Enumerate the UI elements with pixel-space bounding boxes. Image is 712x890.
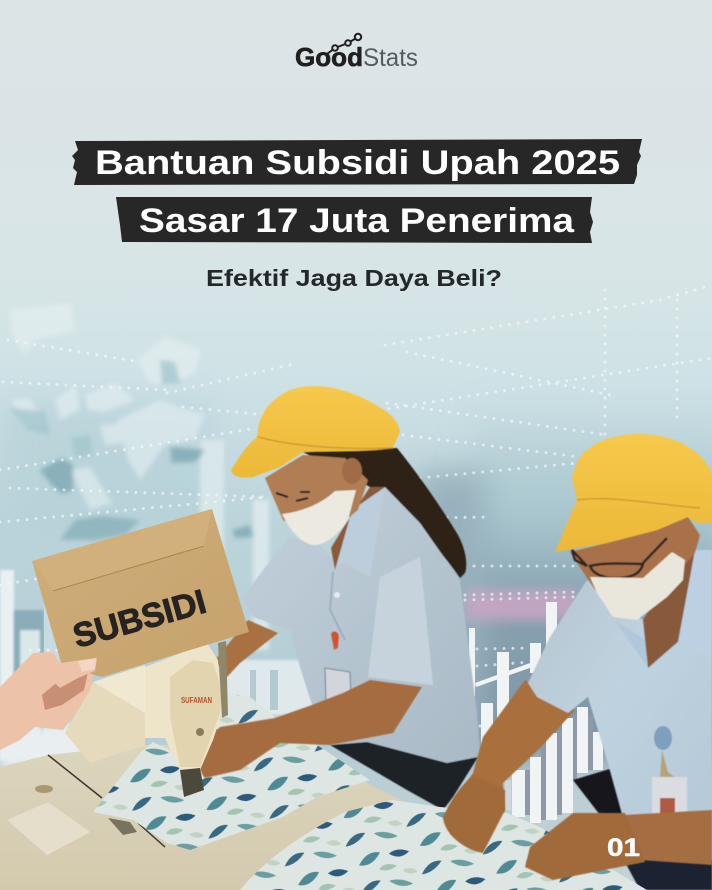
id lanyard <box>660 750 676 778</box>
shirt inner collar <box>615 620 648 668</box>
title banner line 1: Bantuan Subsidi Upah 2025 <box>95 144 620 182</box>
thumb on envelope <box>50 658 97 688</box>
sewing table <box>0 745 407 890</box>
title banner line 1 <box>72 139 642 185</box>
shirt body <box>242 487 480 763</box>
worker one <box>215 386 480 810</box>
pants <box>330 742 478 810</box>
fabric in front <box>240 800 647 890</box>
background: dotted trend lines <box>0 285 712 735</box>
shirt placket <box>330 572 345 640</box>
title banner line 2 <box>116 197 593 243</box>
worker two hands <box>443 775 712 880</box>
id badge <box>652 777 687 817</box>
id badge <box>325 668 351 702</box>
pocket button <box>654 726 672 750</box>
far arm <box>215 620 278 677</box>
pants lower <box>597 810 712 890</box>
envelope <box>32 509 249 677</box>
logo: GoodStats <box>295 34 418 72</box>
icon: logo trend line <box>327 34 361 54</box>
face <box>265 455 368 540</box>
near sleeve <box>368 557 433 685</box>
table panel <box>7 802 90 855</box>
hat <box>555 434 712 552</box>
worker one forearm <box>200 680 422 778</box>
logo: GoodStats: Stats <box>363 44 418 72</box>
mask <box>282 490 356 545</box>
pen <box>331 631 339 650</box>
fingernail <box>78 658 96 672</box>
right hand <box>525 813 645 880</box>
collar <box>333 487 385 577</box>
table hole <box>35 785 53 793</box>
neck <box>331 487 385 570</box>
shirt body <box>528 550 712 817</box>
mask <box>590 552 685 620</box>
forearm <box>625 810 712 865</box>
hand holding envelope <box>0 652 97 750</box>
label: SUBSIDI: SUBSIDI <box>69 583 210 656</box>
eyes <box>276 492 310 501</box>
subtitle: Efektif Jaga Daya Beli? <box>206 265 502 291</box>
background: world map <box>10 303 253 540</box>
near arm <box>443 680 575 853</box>
table slot <box>108 818 137 835</box>
glasses <box>572 538 667 578</box>
pants upper <box>573 768 625 820</box>
worker two <box>443 434 712 890</box>
title banner line 2: Sasar 17 Juta Penerima <box>139 202 575 240</box>
hair <box>303 448 466 578</box>
page number: 01 <box>607 834 640 862</box>
logo: GoodStats: Good <box>295 42 363 72</box>
background: white bar chart <box>469 602 603 823</box>
fabric near machine <box>93 693 370 850</box>
ear <box>342 458 362 484</box>
neck <box>643 553 695 668</box>
face <box>570 517 700 600</box>
sewing machine <box>65 641 228 797</box>
left hand <box>443 775 505 853</box>
envelope flap <box>32 509 212 591</box>
hat <box>231 386 400 478</box>
machine brand: SUFAMAN <box>181 696 212 705</box>
collar <box>678 550 712 658</box>
